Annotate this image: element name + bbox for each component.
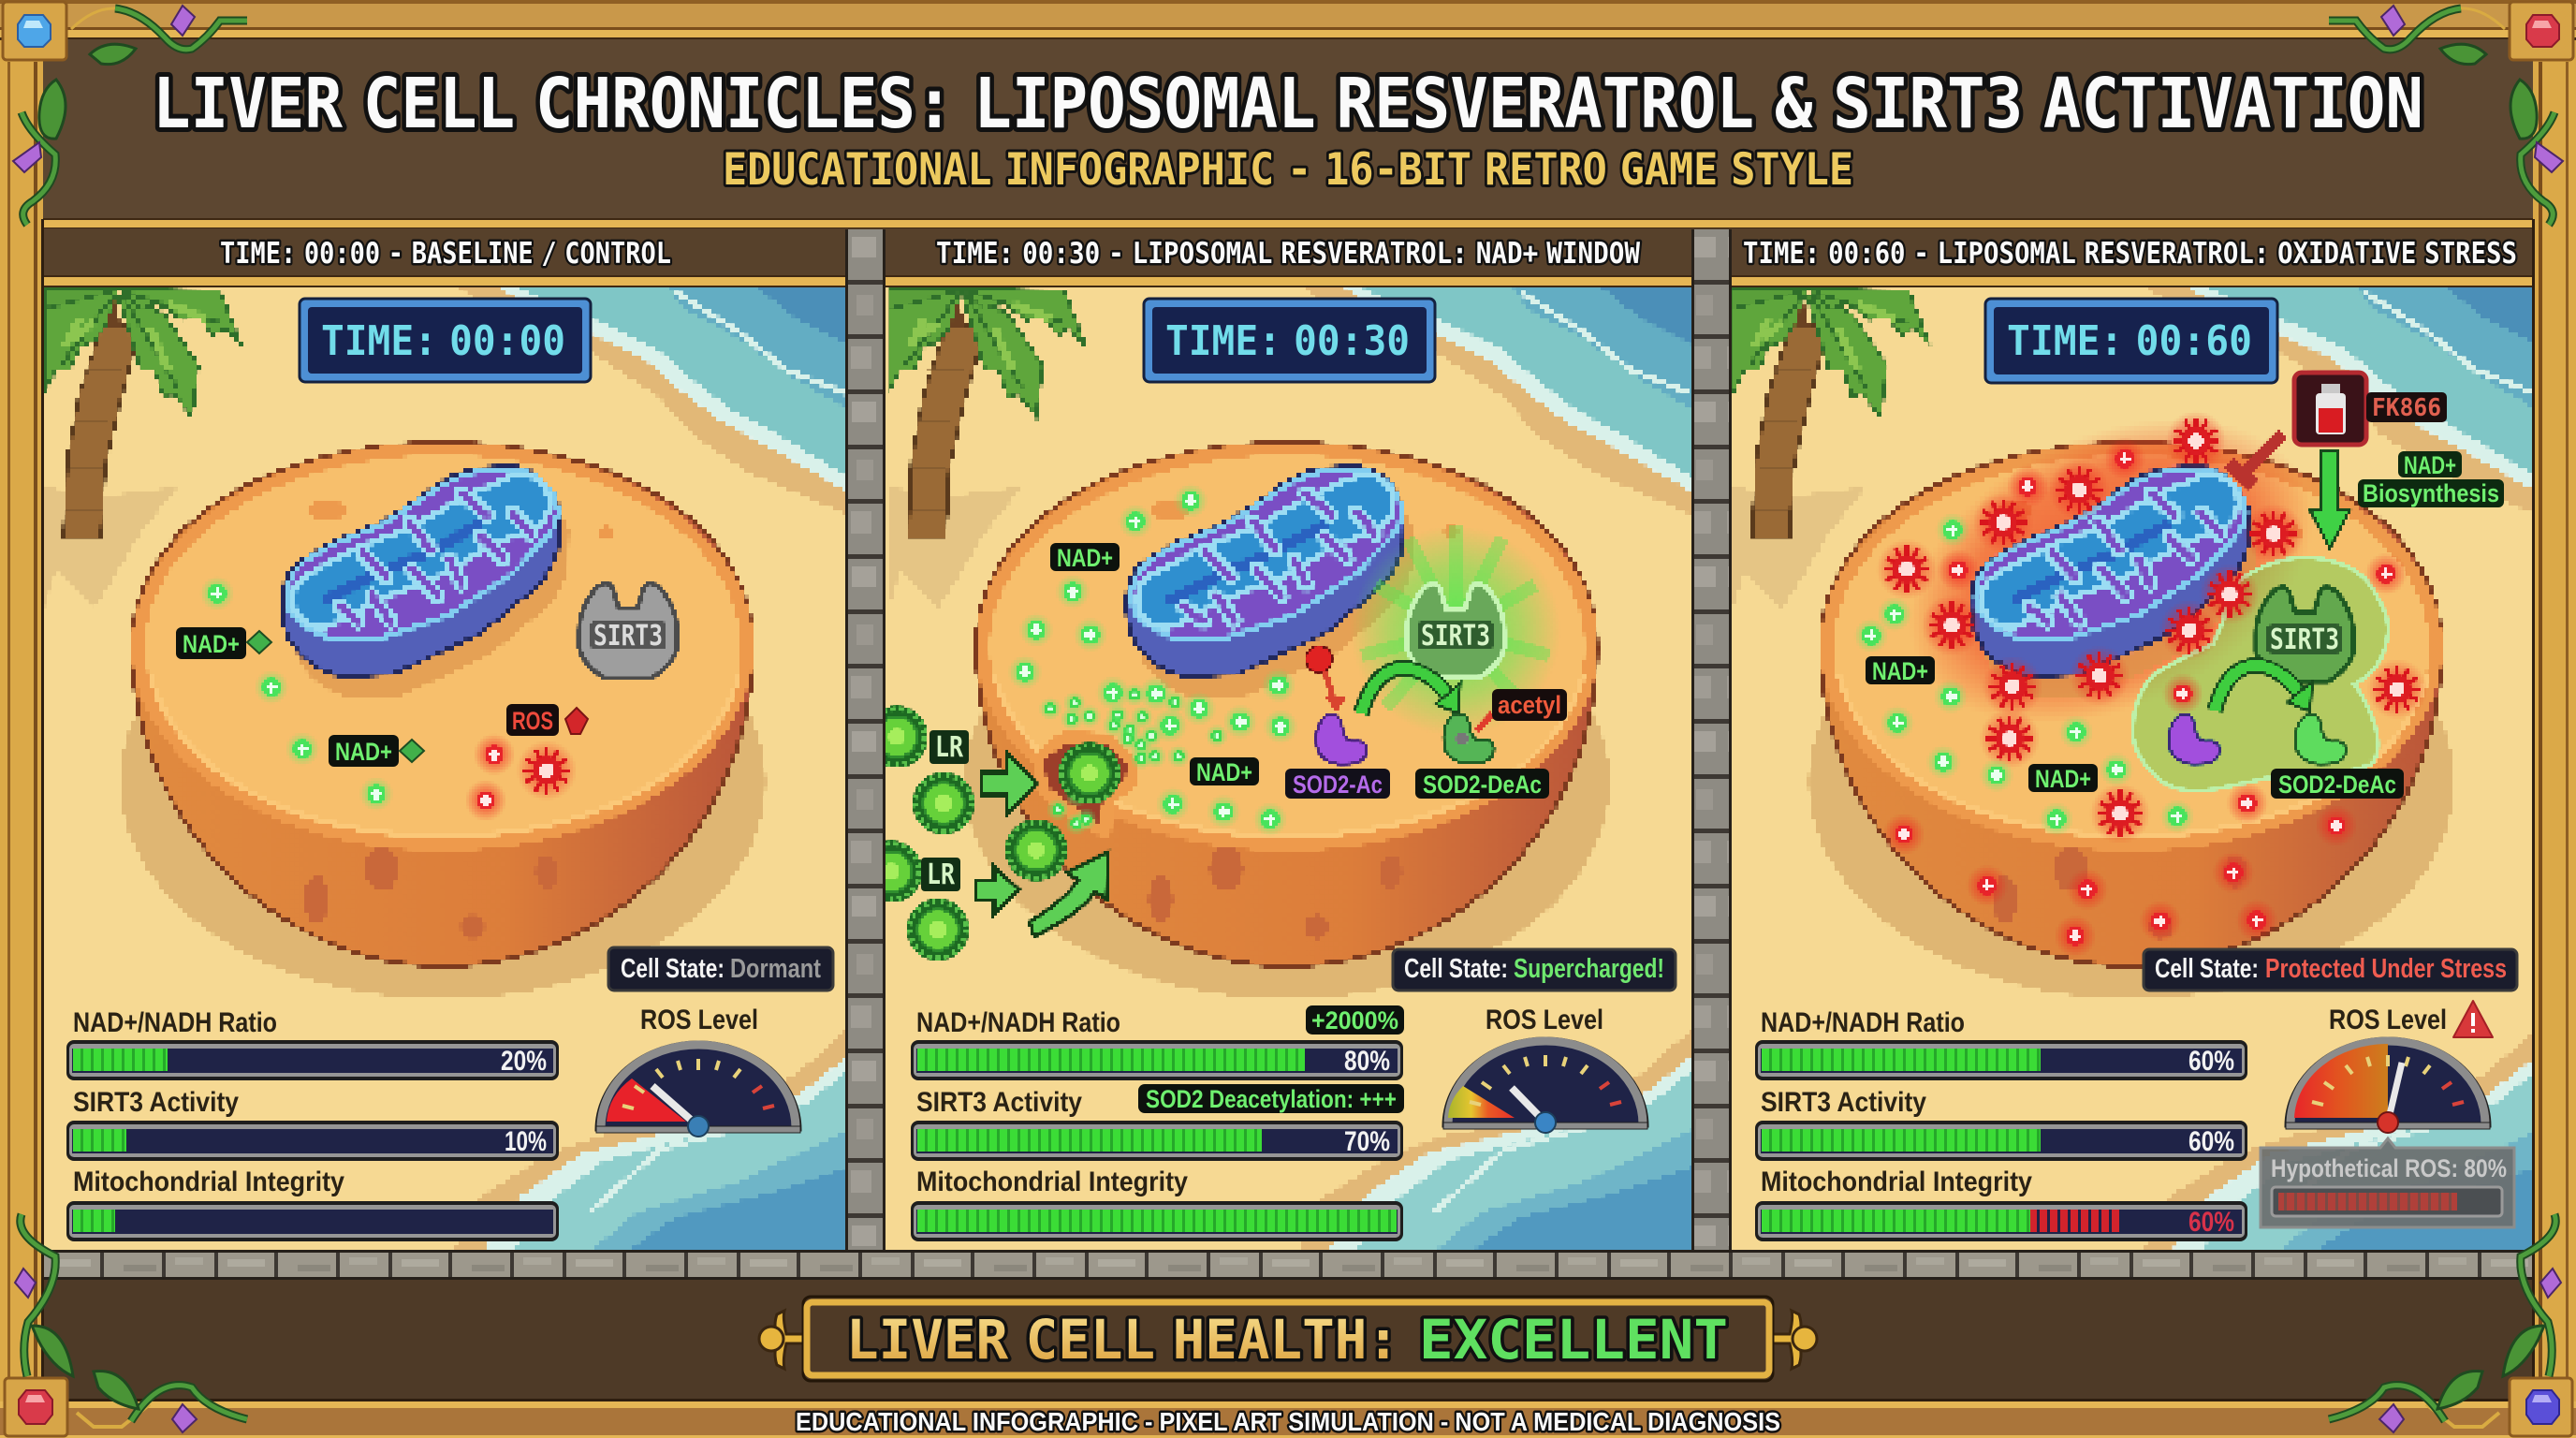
beach and cell art — [28, 281, 871, 1264]
protective green bubble — [2132, 558, 2388, 791]
icon: FK866 vial — [2294, 373, 2366, 445]
panel 1 icons — [200, 577, 677, 821]
fleuron left — [759, 1311, 803, 1369]
timer — [300, 299, 591, 382]
liposomal resveratrol vesicles — [860, 706, 1120, 961]
panel 1 heading: TIME: 00:00 - BASELINE / CONTROL — [220, 237, 671, 271]
metric: mitochondrial integrity: Mitochondrial Integrity — [1761, 1167, 2032, 1197]
metric: mitochondrial integrity: 60% — [2188, 1207, 2234, 1238]
icon: SOD2 deacetylated — [1443, 713, 1494, 763]
metric: SIRT3 activity: 70% — [1344, 1126, 1390, 1157]
ROS gauge — [596, 1005, 800, 1137]
ROS tag — [506, 704, 588, 736]
acetyl tag: acetyl — [1498, 691, 1561, 719]
SIRT3 label: SIRT3 — [1421, 620, 1490, 653]
metric: NAD+/NADH ratio: NAD+/NADH Ratio — [1761, 1007, 1965, 1038]
metric: SIRT3 activity — [911, 1084, 1404, 1161]
timer — [1985, 299, 2277, 383]
NAD+ tag — [329, 735, 424, 767]
ROS gauge: ROS Level — [2329, 1005, 2447, 1035]
title: LIVER CELL CHRONICLES: LIPOSOMAL RESVERATROL & SIRT3 ACTIVATION — [153, 64, 2423, 144]
metric: NAD+/NADH ratio: 20% — [501, 1046, 547, 1077]
panel 2 heading: TIME: 00:30 - LIPOSOMAL RESVERATROL: NAD+ WINDOW — [936, 237, 1640, 271]
panel 3 icons — [1854, 411, 2427, 957]
metric: mitochondrial integrity — [911, 1167, 1403, 1241]
icon: active SIRT3 — [1407, 583, 1504, 678]
ROS gauge: ROS Level — [640, 1005, 758, 1035]
deacetylation arrow — [1361, 668, 1493, 730]
NAD+ tag: NAD+ — [1196, 758, 1252, 786]
cell state: Cell State: — [621, 954, 724, 984]
ROS particles — [1877, 411, 2427, 957]
liposome entry pit — [1037, 737, 1133, 833]
metric: SIRT3 activity: 60% — [2188, 1126, 2234, 1157]
SOD2-Ac tag: SOD2-Ac — [1293, 770, 1383, 799]
FK866 tag: FK866 — [2372, 394, 2441, 422]
NAD+ Biosynthesis tag: Biosynthesis — [2363, 479, 2499, 507]
metric: NAD+/NADH ratio — [911, 1005, 1404, 1080]
icon: SIRT3 — [2256, 587, 2353, 682]
footer disclaimer: EDUCATIONAL INFOGRAPHIC - PIXEL ART SIMULATION - NOT A MEDICAL DIAGNOSIS — [796, 1407, 1780, 1436]
NAD+ Biosynthesis tag: NAD+ — [2404, 451, 2456, 479]
FK866 inhibition bar — [2229, 433, 2283, 485]
metric: SIRT3 activity: SOD2 Deacetylation: +++ — [1146, 1085, 1397, 1113]
metric: NAD+/NADH ratio — [1755, 1007, 2247, 1080]
biosynthesis arrow — [2310, 451, 2349, 548]
cell state: Cell State: — [2155, 954, 2259, 984]
metric: mitochondrial integrity: Mitochondrial Integrity — [73, 1167, 344, 1197]
metric: NAD+/NADH ratio: 60% — [2188, 1046, 2234, 1077]
panel 2 icons — [860, 484, 1560, 961]
icon: SOD2 acetylated — [2169, 714, 2219, 764]
timer: TIME: 00:60 — [2007, 317, 2252, 365]
icon: warning triangle — [2453, 1001, 2493, 1037]
ROS gauge: ROS Level — [1486, 1005, 1603, 1035]
fleuron right — [1773, 1311, 1817, 1369]
timer: TIME: 00:30 — [1165, 317, 1410, 365]
metric: SIRT3 activity — [1755, 1087, 2247, 1161]
panel 2: NAD+ window — [860, 281, 1715, 1264]
panel 1: baseline — [28, 281, 871, 1264]
status banner: LIVER CELL HEALTH: — [846, 1308, 1399, 1372]
SIRT3 label: SIRT3 — [593, 620, 663, 653]
metric: NAD+/NADH ratio: +2000% — [1311, 1006, 1398, 1034]
uptake arrows — [975, 752, 1108, 936]
SOD2-DeAc tag: SOD2-DeAc — [1423, 770, 1542, 799]
cell state: Dormant — [730, 954, 821, 984]
icon: dormant SIRT3 — [579, 583, 677, 678]
corner gem: purple — [2510, 1378, 2572, 1436]
cell state — [1393, 949, 1676, 990]
icon: SOD2 deacetylated — [2295, 714, 2346, 764]
beach and cell art — [872, 281, 1715, 1264]
SOD2-DeAc tag: SOD2-DeAc — [2278, 770, 2396, 799]
LR label: LR — [927, 858, 956, 891]
cell state: Supercharged! — [1514, 954, 1664, 984]
NAD+ tag — [176, 627, 271, 659]
mitochondrion redraw — [1971, 466, 2258, 697]
cell state: Protected Under Stress — [2265, 954, 2507, 984]
corner gem: red — [2510, 2, 2573, 60]
icon: SOD2 acetylated — [1316, 714, 1367, 764]
deacetylation arrow — [2215, 666, 2312, 712]
metric: NAD+/NADH ratio: NAD+/NADH Ratio — [73, 1007, 277, 1038]
metric: SIRT3 activity: SIRT3 Activity — [73, 1087, 239, 1118]
acetyl bead — [1306, 646, 1346, 712]
NAD+ tag: NAD+ — [183, 630, 240, 658]
metric: mitochondrial integrity — [1755, 1167, 2247, 1241]
ROS gauge — [1443, 1005, 1647, 1133]
metric: mitochondrial integrity: Mitochondrial Integrity — [916, 1167, 1188, 1197]
NAD+ tag: NAD+ — [1057, 544, 1113, 572]
ROS tag: ROS — [512, 707, 553, 735]
status banner: EXCELLENT — [1419, 1308, 1728, 1372]
beach and cell art — [1717, 281, 2559, 1264]
metric: NAD+/NADH ratio: NAD+/NADH Ratio — [916, 1007, 1120, 1038]
NAD+ particles — [1008, 484, 1297, 836]
status banner — [803, 1297, 1773, 1381]
ROS gauge — [2286, 1005, 2490, 1133]
LR label: LR — [935, 731, 964, 764]
hypothetical ROS callout — [2261, 1138, 2514, 1227]
timer — [1144, 299, 1435, 382]
NAD+ tag: NAD+ — [335, 738, 392, 766]
red oxidative halo — [1860, 358, 2362, 785]
timer: TIME: 00:00 — [321, 317, 565, 365]
NAD+ tag: NAD+ — [1872, 657, 1928, 685]
cell state: Cell State: — [1404, 954, 1508, 984]
metric: NAD+/NADH ratio — [66, 1007, 559, 1080]
metric: mitochondrial integrity — [66, 1167, 559, 1241]
ROS particles — [465, 734, 577, 821]
stone dividers — [44, 229, 2532, 1280]
NAD+ tag: NAD+ — [2035, 765, 2091, 793]
corner gem: red — [5, 1378, 67, 1436]
metric: NAD+/NADH ratio: 80% — [1344, 1046, 1390, 1077]
NAD+ particles — [1854, 513, 2194, 836]
NAD+ Biosynthesis tag — [2358, 451, 2504, 507]
NAD+ dots — [200, 577, 393, 811]
SIRT3 label: SIRT3 — [2270, 624, 2339, 656]
metric: SIRT3 activity — [66, 1087, 559, 1161]
SIRT3 glow — [1351, 524, 1560, 736]
panel 3: oxidative stress — [1717, 281, 2559, 1264]
cell state — [2144, 949, 2517, 990]
metric: SIRT3 activity: 10% — [505, 1126, 547, 1157]
metric: SIRT3 activity: SIRT3 Activity — [1761, 1087, 1926, 1118]
metric: SIRT3 activity: SIRT3 Activity — [916, 1087, 1082, 1118]
corner gem: blue — [3, 2, 66, 60]
hypothetical ROS callout: Hypothetical ROS: 80% — [2271, 1154, 2507, 1182]
subtitle: EDUCATIONAL INFOGRAPHIC - 16-BIT RETRO GAME STYLE — [723, 144, 1853, 196]
cell state — [608, 947, 833, 990]
